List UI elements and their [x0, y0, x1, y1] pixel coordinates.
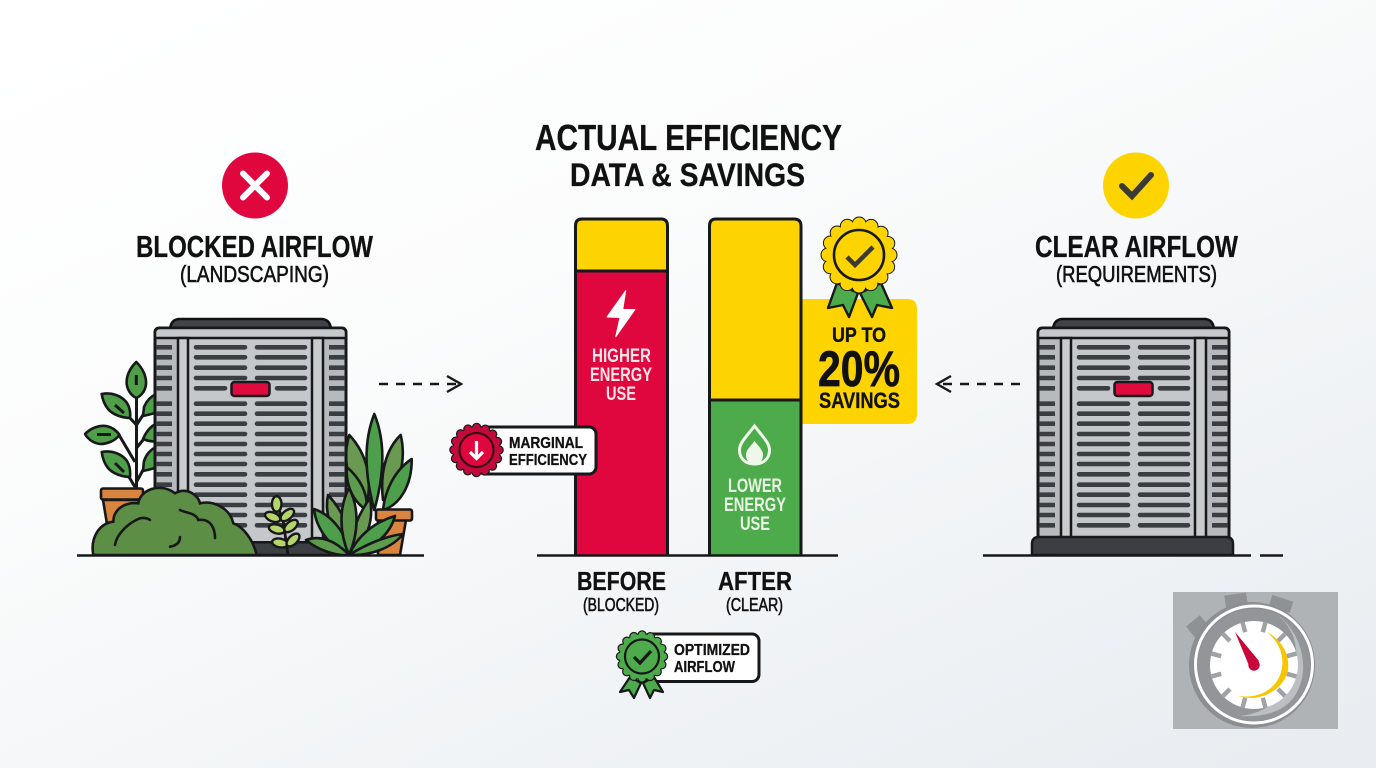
plant: tall plant behind right: [346, 414, 412, 555]
bar: after: [710, 219, 801, 555]
subheading: landscaping: (LANDSCAPING): [180, 261, 329, 287]
title: ACTUAL EFFICIENCY: [535, 117, 842, 158]
callout: up to 20% savings: [802, 299, 917, 424]
label: lower energy use: ENERGY: [724, 495, 786, 516]
label: lower energy use: USE: [740, 514, 770, 535]
callout: marginal efficiency: [454, 427, 596, 474]
callout: up to 20% savings: UP TO: [832, 324, 886, 347]
icon: red X circle: [222, 152, 288, 218]
callout: optimized airflow: AIRFLOW: [674, 659, 735, 676]
heading: blocked airflow: BLOCKED AIRFLOW: [136, 230, 373, 264]
callout: up to 20% savings: SAVINGS: [819, 388, 900, 413]
panel: clear airflow: [983, 152, 1283, 556]
label: higher energy use: USE: [606, 384, 636, 405]
icon: yellow award badge: [828, 224, 892, 317]
title: [535, 117, 842, 193]
bar: before: [576, 219, 668, 555]
heading: clear airflow: CLEAR AIRFLOW: [1035, 230, 1238, 264]
label: before blocked: BEFORE: [577, 566, 666, 596]
plant: potted leafy plant: [85, 362, 157, 530]
label: before blocked: [577, 566, 666, 615]
arrow: left dashed to chart: [379, 376, 461, 392]
baseline: [537, 554, 838, 557]
callout: optimized airflow: [620, 634, 759, 698]
icon: air conditioner unit, clear: [1032, 319, 1233, 555]
arrow: right dashed to chart: [937, 376, 1020, 392]
ground line: right: [983, 554, 1283, 557]
label: higher energy use: ENERGY: [590, 365, 652, 386]
title: DATA & SAVINGS: [570, 157, 805, 193]
label: after clear: (CLEAR): [726, 595, 783, 615]
icon: stopwatch gauge: [1173, 592, 1338, 729]
icon: lightning bolt: [607, 291, 635, 337]
label: lower energy use: LOWER: [728, 476, 782, 497]
subheading: requirements: (REQUIREMENTS): [1056, 261, 1217, 287]
label: before blocked: (BLOCKED): [583, 595, 659, 615]
label: after clear: AFTER: [718, 566, 792, 596]
plant: small sprig: [264, 496, 302, 555]
plant: green shrub: [93, 488, 257, 555]
callout: marginal efficiency: MARGINAL: [509, 435, 583, 452]
icon: flame: [740, 426, 770, 464]
icon: air conditioner unit, blocked: [149, 319, 350, 555]
label: higher energy use: [590, 346, 652, 405]
label: higher energy use: HIGHER: [592, 346, 651, 367]
callout: optimized airflow: OPTIMIZED: [674, 642, 750, 659]
panel: blocked airflow: [77, 152, 424, 556]
bar chart: before and after: [454, 219, 917, 698]
plant: front agave: [306, 488, 403, 555]
ground line: left: [77, 554, 424, 557]
icon: yellow check circle: [1103, 152, 1169, 218]
label: after clear: [718, 566, 792, 615]
callout: marginal efficiency: EFFICIENCY: [509, 452, 587, 469]
label: lower energy use: [724, 476, 786, 535]
callout: up to 20% savings: 20%: [818, 341, 900, 397]
